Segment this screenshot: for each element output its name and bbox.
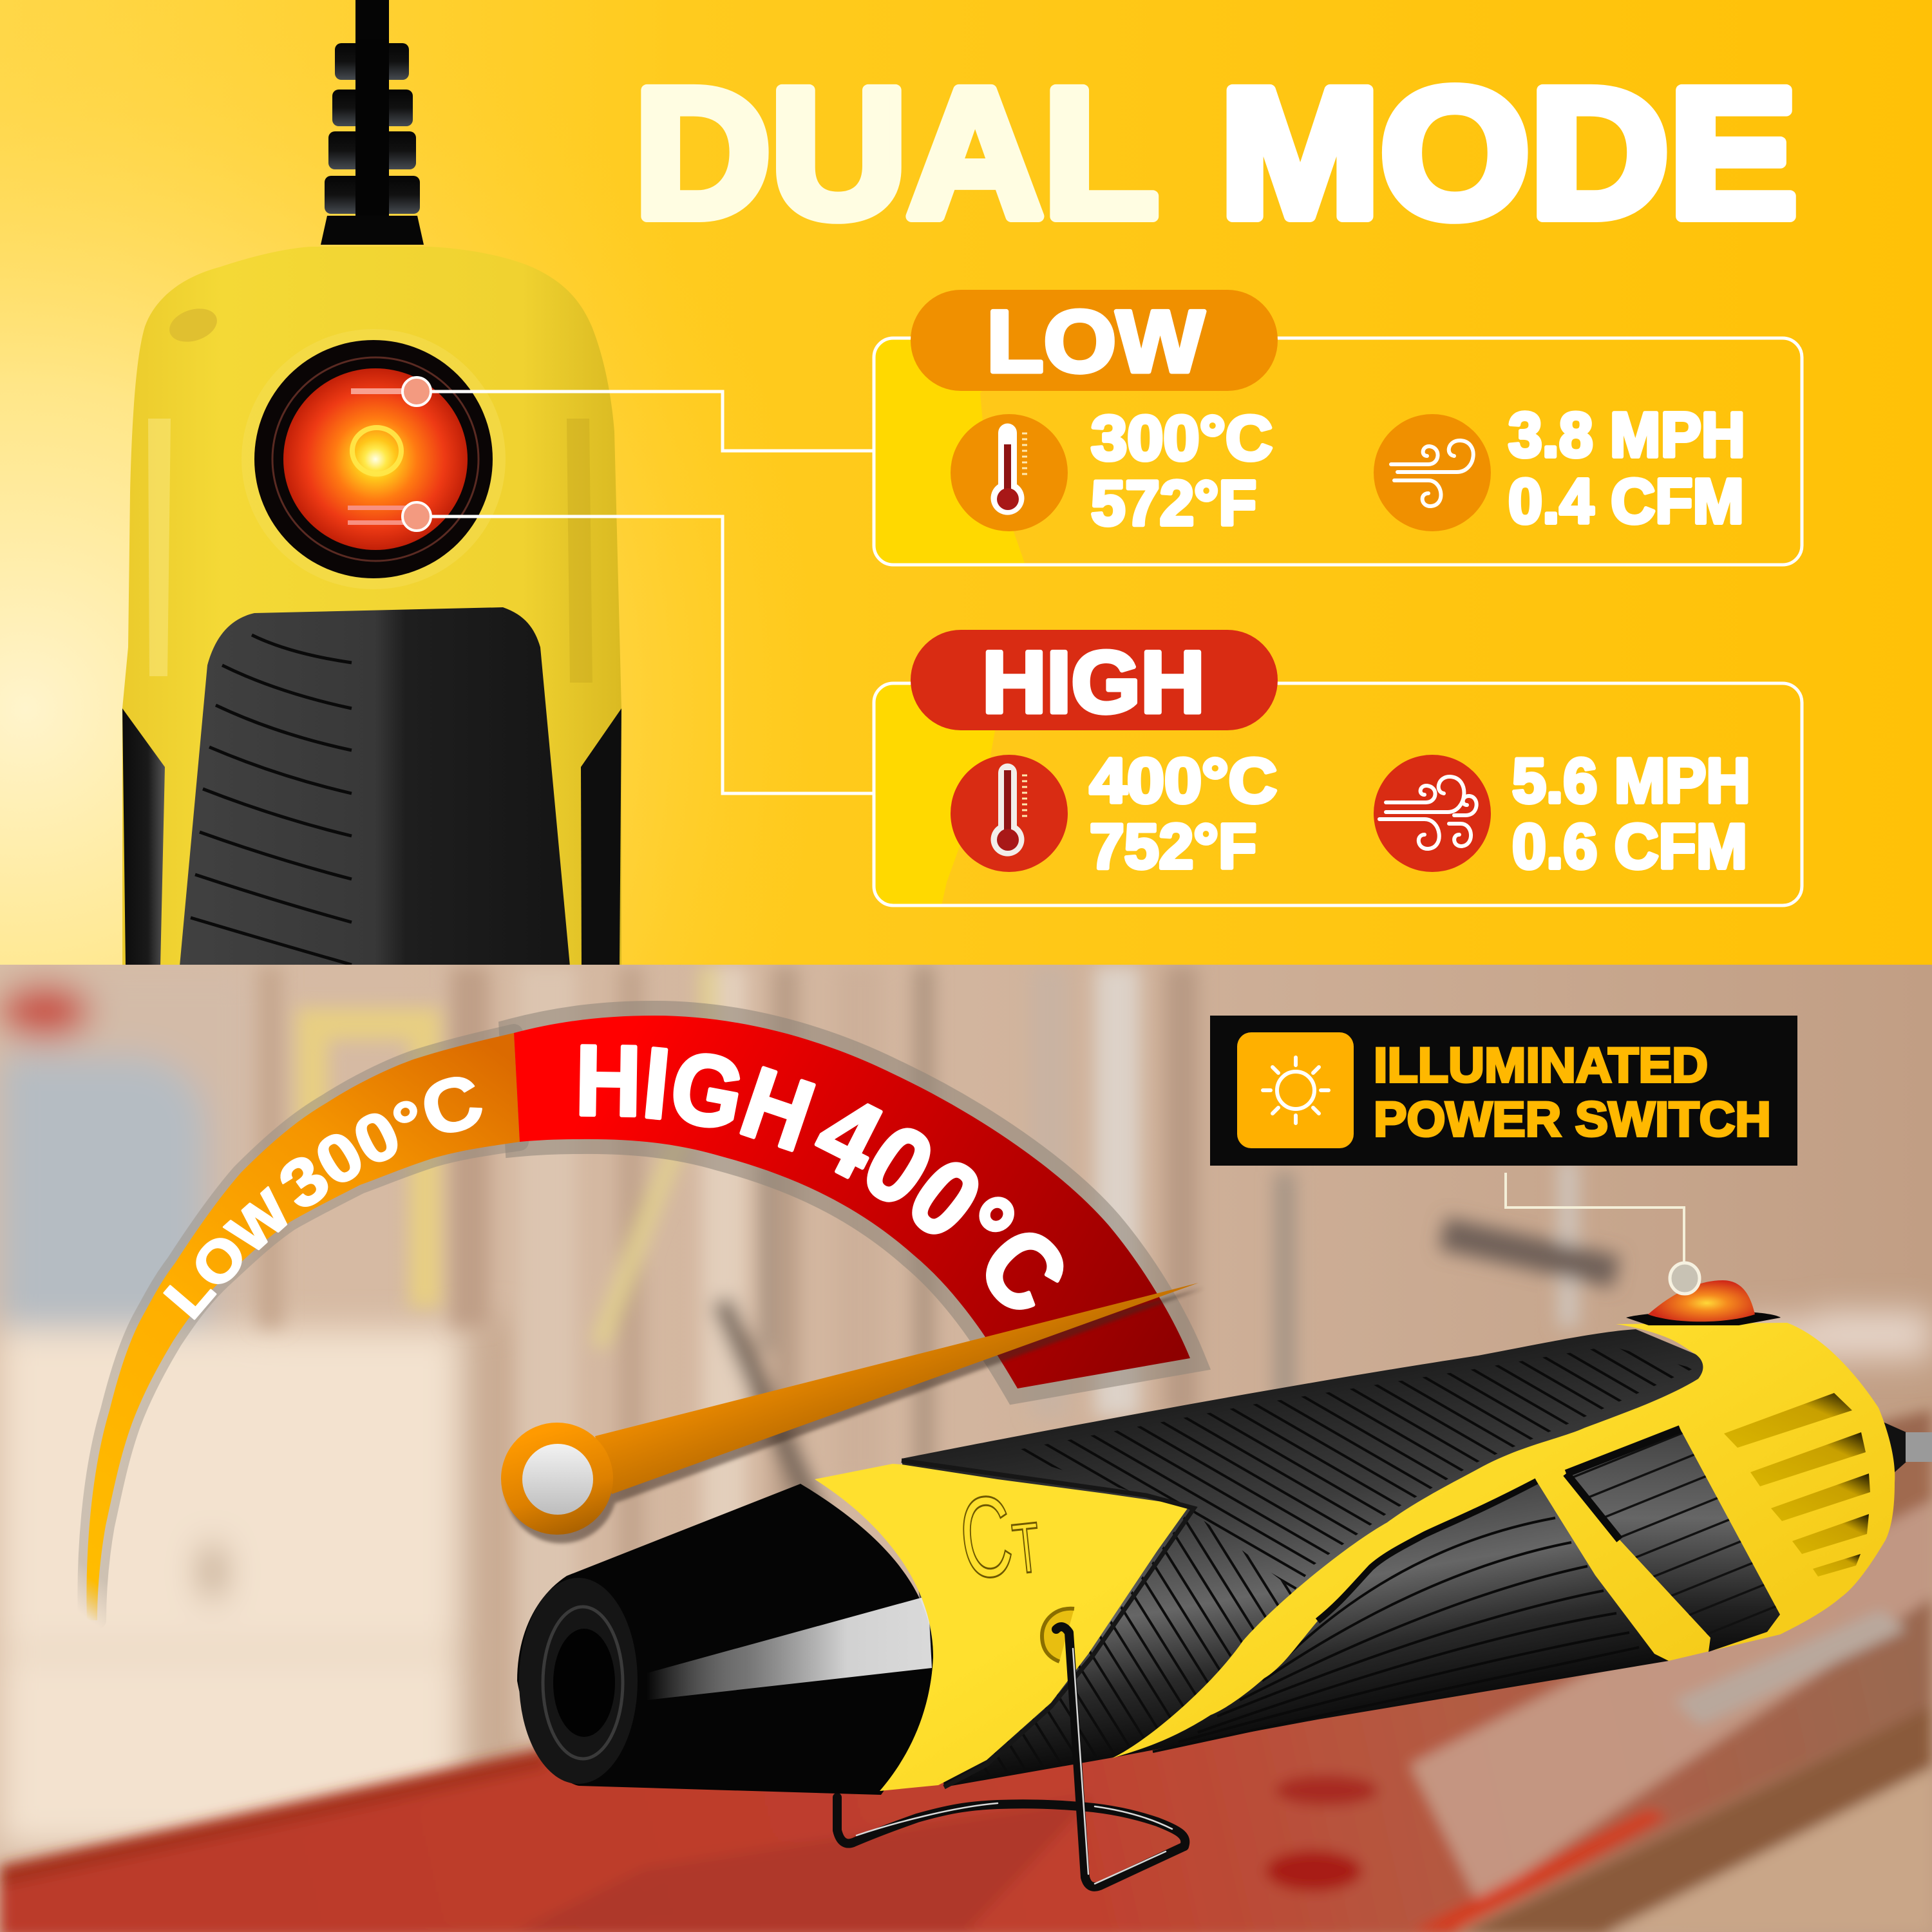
rear plug [1883, 1422, 1932, 1482]
panel: low mode [874, 290, 1802, 565]
high badge: HIGH [982, 633, 1205, 731]
temperature high: 400°C [1090, 745, 1277, 816]
upper grip grooves [1005, 1346, 1694, 1591]
icon: thermometer high [951, 755, 1068, 872]
nozzle [517, 1484, 933, 1795]
wire stand hook [1042, 1609, 1074, 1662]
lower grip grooves [1153, 1518, 1639, 1752]
temperature high: 752°F [1090, 811, 1256, 882]
needle hub [501, 1423, 613, 1535]
yellow body [122, 247, 621, 966]
front yellow collar [815, 1464, 1189, 1791]
temperature low: 300°C [1091, 402, 1273, 473]
illuminated rocker switch [242, 329, 506, 589]
rear vents [1724, 1393, 1870, 1577]
rear grip panel [1566, 1429, 1780, 1652]
gauge halo: high [514, 1016, 1190, 1388]
airflow low: 0.4 CFM [1508, 466, 1744, 536]
callout connector line [1506, 1173, 1684, 1262]
title: MODE [1220, 51, 1797, 256]
airflow low [1508, 399, 1745, 536]
icon: sun [1237, 1032, 1354, 1148]
shoulder lights [567, 419, 592, 683]
title: DUAL [634, 51, 1159, 256]
grip body [902, 1329, 1707, 1787]
product: heat gun [517, 1280, 1932, 1887]
icon: wind low [1374, 414, 1491, 531]
illustration: hand-held heat tool front view [122, 0, 621, 966]
airflow low: 3.8 MPH [1508, 399, 1745, 470]
right side grip [581, 708, 621, 966]
connector line: high setting [431, 516, 874, 793]
low badge [911, 290, 1278, 391]
cord strain relief [321, 39, 424, 245]
power cord [355, 0, 389, 39]
temperature low: 572°F [1091, 468, 1256, 538]
gauge label: high: HIGH 400°C [580, 1044, 1064, 1310]
yellow S stripe and rear cap [1112, 1323, 1895, 1758]
switch dome on tool [1626, 1280, 1781, 1325]
callout: illuminated power switch: POWER SWITCH [1374, 1092, 1771, 1147]
collar edge [902, 1461, 1194, 1787]
front wedge grooves [966, 1510, 1294, 1781]
icon: wind high [1374, 755, 1491, 872]
connector line: low setting [431, 392, 874, 451]
black textured panel [180, 607, 570, 966]
panel: high mode [874, 630, 1802, 905]
gauge needle [595, 1283, 1198, 1494]
gauge label: low: LOW 300°C [163, 1077, 482, 1320]
gauge halo: low [86, 1033, 520, 1620]
callout marker [1670, 1263, 1700, 1294]
wire stand base [837, 1797, 1185, 1846]
callout: illuminated power switch: ILLUMINATED [1374, 1038, 1708, 1093]
icon: thermometer low [951, 414, 1068, 531]
temperature gauge [77, 1001, 1211, 1622]
high badge [911, 630, 1278, 731]
title [634, 51, 1797, 256]
low badge: LOW [987, 292, 1205, 390]
callout: illuminated power switch [1210, 1016, 1797, 1166]
gauge arc: low [86, 1033, 520, 1620]
airflow high: 5.6 MPH [1512, 745, 1750, 816]
airflow high [1512, 745, 1750, 882]
switch marker: low [402, 377, 431, 406]
switch marker: high [402, 502, 431, 531]
wire stand leg [1056, 1627, 1184, 1887]
top panel background [0, 0, 1932, 966]
workshop blurred background [0, 965, 1932, 1932]
stripe shadow edge [1318, 1481, 1537, 1621]
needle shadow [506, 1288, 1204, 1543]
wooden table with red paint [0, 1410, 1932, 1932]
gauge arc: high [514, 1016, 1190, 1388]
temperature low [1091, 402, 1273, 538]
logo: CT [954, 1468, 1045, 1604]
temperature high [1090, 745, 1277, 882]
airflow high: 0.6 CFM [1512, 811, 1747, 882]
left side grip [122, 708, 165, 966]
